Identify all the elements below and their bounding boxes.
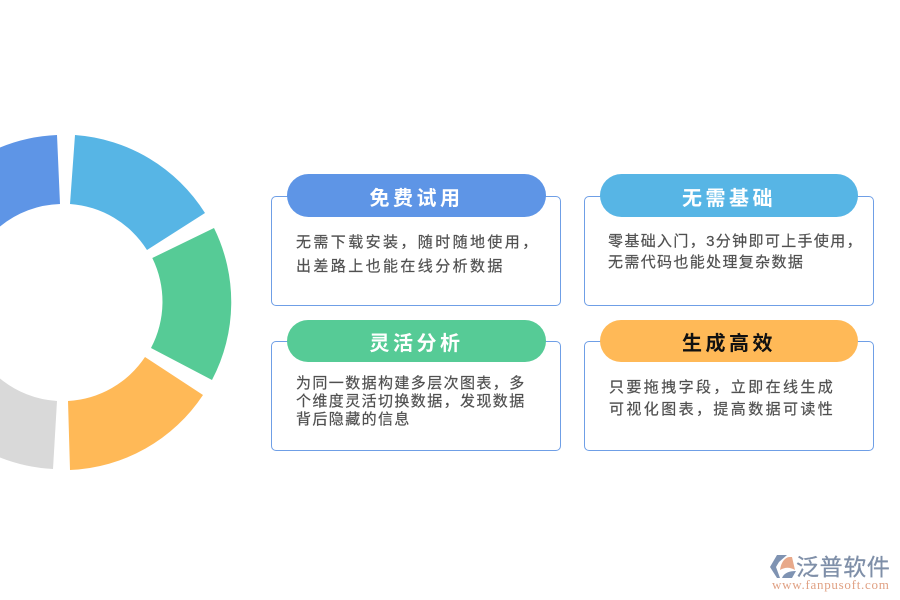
- text block: 零基础入门，3分钟即可上手使用，: [608, 232, 863, 250]
- segment: sky blue: [70, 135, 205, 250]
- panel: free trial: [271, 174, 561, 306]
- panel: no foundation needed: [584, 174, 874, 306]
- text block: 可视化图表，提高数据可读性: [609, 401, 835, 418]
- text block: 背后隐藏的信息: [296, 411, 411, 428]
- segment: gray: [0, 378, 57, 469]
- text block: 个维度灵活切换数据，发现数据: [296, 393, 526, 410]
- heading: flexible analysis: 灵活分析: [370, 333, 464, 355]
- text block: 为同一数据构建多层次图表，多: [296, 375, 526, 392]
- text block: 无需下载安装，随时随地使用，: [296, 234, 540, 250]
- text block: 无需代码也能处理复杂数据: [608, 254, 804, 270]
- heading: free trial: [287, 174, 546, 217]
- panel: efficient generation: [584, 320, 874, 451]
- heading: no foundation needed: [600, 174, 858, 217]
- logo: fanpu software: [770, 554, 890, 592]
- card border: [271, 196, 561, 306]
- text block: [296, 234, 540, 274]
- segment: orange: [68, 357, 203, 470]
- panel: flexible analysis: [271, 320, 561, 451]
- card border: [271, 341, 561, 451]
- heading: no foundation needed: 无需基础: [682, 188, 776, 210]
- text block: [609, 378, 835, 418]
- donut chart: [0, 135, 232, 470]
- text block: 只要拖拽字段，立即在线生成: [609, 378, 835, 396]
- heading: free trial: 免费试用: [370, 188, 464, 210]
- heading: efficient generation: [600, 320, 858, 362]
- card border: [584, 196, 874, 306]
- text block: [296, 375, 526, 428]
- heading: flexible analysis: [287, 320, 546, 362]
- segment: blue: [0, 135, 60, 226]
- heading: efficient generation: 生成高效: [682, 333, 776, 355]
- text block: [608, 232, 863, 270]
- text block: 出差路上也能在线分析数据: [296, 258, 505, 274]
- segment: green: [151, 228, 231, 380]
- brand name: 泛普软件: [796, 554, 890, 580]
- icon: logo mark: [770, 555, 796, 578]
- card border: [584, 341, 874, 451]
- website url: www.fanpusoft.com: [772, 577, 890, 592]
